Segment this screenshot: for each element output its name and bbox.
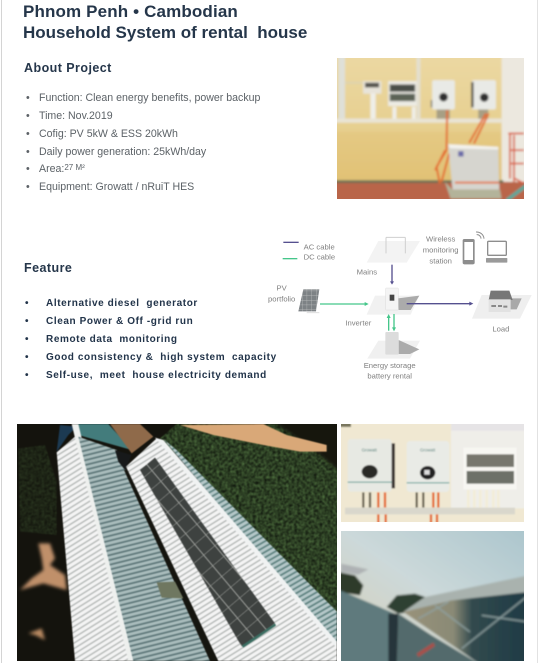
photo: aerial roof with solar panels	[17, 424, 337, 661]
list: features: •	[25, 334, 29, 345]
node: pv portfolio	[268, 284, 319, 313]
list: project details: Area:27 M²	[39, 163, 85, 175]
list: project details: •	[26, 163, 30, 175]
legend	[283, 242, 335, 261]
node: load house	[472, 291, 532, 333]
list: features: •	[25, 370, 29, 381]
node: inverter: Inverter	[345, 318, 372, 327]
list: project details: Cofig: PV 5kW & ESS 20kWh	[39, 128, 178, 140]
list: features: •	[25, 316, 29, 327]
list: project details: Equipment: Growatt / nRuiT HES	[39, 181, 194, 193]
node: wireless monitoring station	[423, 232, 507, 265]
arrow: mains to inverter	[390, 265, 394, 285]
photo: inverter close-up	[341, 424, 524, 522]
list: features: Alternative diesel generator	[46, 298, 198, 309]
photo: inverter close-up: Growatt	[362, 448, 378, 453]
node: mains	[357, 237, 420, 277]
node: wireless monitoring station: monitoring	[423, 245, 459, 254]
photo: inverters and battery on yellow wall	[337, 58, 524, 199]
node: energy storage battery: Energy storage	[364, 361, 416, 370]
node: inverter	[345, 288, 419, 327]
node: wireless monitoring station: Wireless	[426, 235, 456, 244]
list: features: Self-use, meet house electricity demand	[46, 370, 267, 381]
node: load house: Load	[492, 324, 509, 333]
list: features	[25, 298, 277, 381]
title: Phnom Penh • Cambodian	[23, 2, 238, 21]
node: pv portfolio: PV	[277, 284, 288, 293]
arrow: inverter to load	[407, 302, 473, 306]
legend: AC cable	[304, 242, 335, 251]
node: energy storage battery	[364, 332, 420, 381]
list: features: •	[25, 352, 29, 363]
list: project details: Daily power generation: 25kWh/day	[39, 146, 206, 158]
list: project details: Function: Clean energy benefits, power backup	[39, 92, 260, 104]
list: project details: •	[26, 146, 30, 158]
list: project details: Time: Nov.2019	[39, 110, 113, 122]
title	[23, 2, 307, 42]
node: wireless monitoring station: station	[429, 256, 452, 265]
node: pv portfolio: portfolio	[268, 294, 295, 303]
legend: DC cable	[304, 252, 335, 261]
title: Household System of rental house	[23, 23, 307, 42]
node: energy storage battery: battery rental	[367, 372, 412, 381]
list: features: •	[25, 298, 29, 309]
arrows: inverter and battery	[387, 314, 396, 331]
node: mains: Mains	[357, 268, 377, 277]
list: project details: •	[26, 128, 30, 140]
list: project details: •	[26, 181, 30, 193]
heading: feature: Feature	[24, 261, 72, 275]
list: project details: •	[26, 92, 30, 104]
list: project details: •	[26, 110, 30, 122]
photo: inverter close-up: Growatt	[420, 448, 436, 453]
arrow: pv to inverter	[320, 302, 369, 306]
diagram: system wiring	[268, 232, 532, 381]
list: features: Clean Power & Off -grid run	[46, 316, 193, 327]
list: project details	[26, 92, 260, 193]
list: features: Good consistency & high system capacity	[46, 352, 277, 363]
list: features: Remote data monitoring	[46, 334, 178, 345]
photo: solar array at dusk	[341, 531, 524, 661]
heading: about project: About Project	[24, 61, 112, 75]
